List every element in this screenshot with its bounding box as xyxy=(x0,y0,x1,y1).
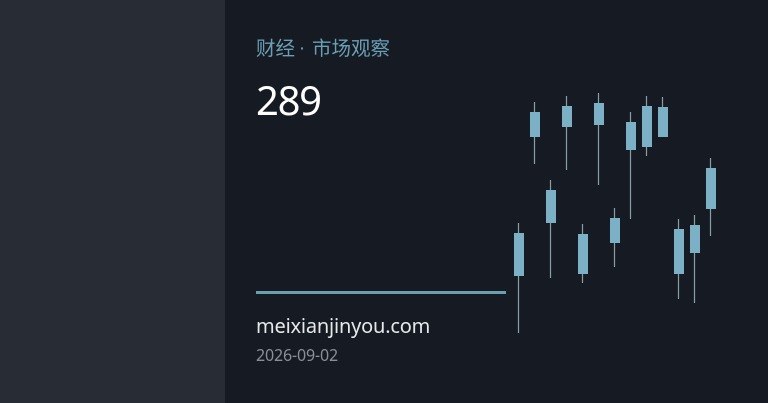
heading: category: · xyxy=(299,37,305,59)
heading: category: 市场观察 xyxy=(312,34,390,61)
site name: meixianjinyou.com xyxy=(256,312,430,339)
heading: category xyxy=(256,34,390,61)
date: 2026-09-02 xyxy=(256,344,338,366)
main number: 289 xyxy=(256,72,321,127)
left sidebar panel xyxy=(0,0,225,403)
heading: category: 财经 xyxy=(256,34,295,61)
accent divider line xyxy=(256,291,506,294)
